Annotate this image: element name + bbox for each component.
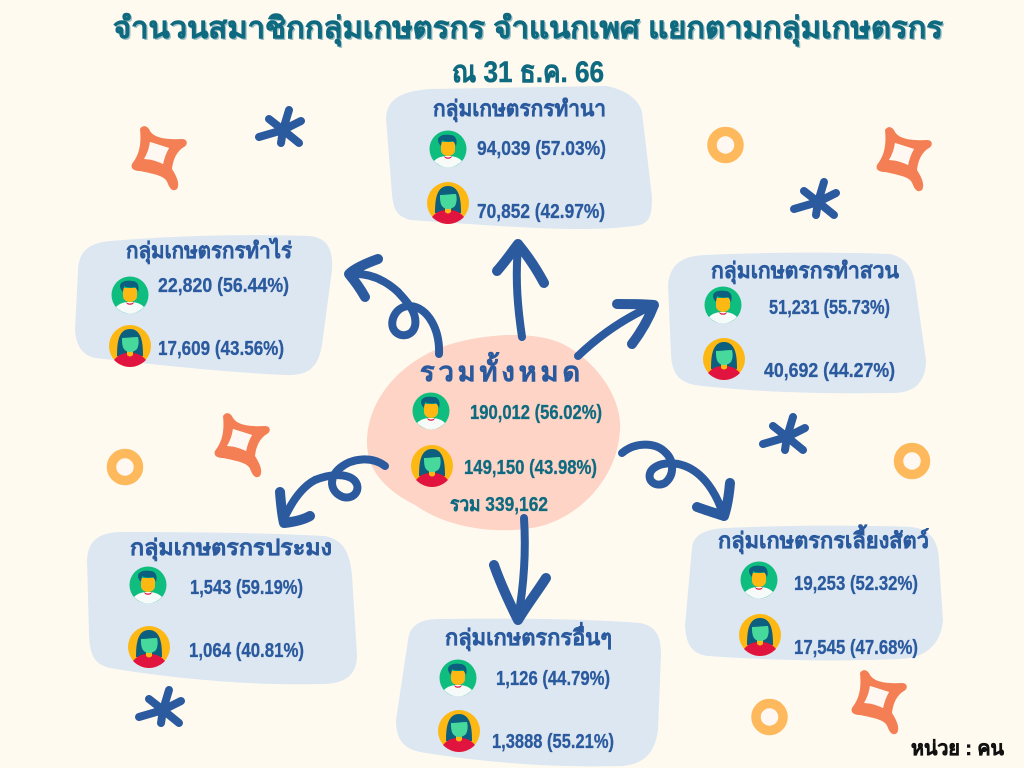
icon: orange sparkle top left [132, 126, 187, 190]
arrow: to fishery farmers [280, 459, 385, 523]
panel: rice farmers: กลุ่มเกษตรกรทำนา [433, 96, 606, 123]
arrow: to field crop farmers [349, 259, 439, 354]
panel: field crop farmers: 22,820 (56.44%) [158, 275, 289, 297]
icon: yellow ring bottom [756, 704, 783, 730]
panel: field crop farmers: กลุ่มเกษตรกรทำไร่ [126, 237, 292, 265]
arrow: to rice farmers [497, 244, 544, 337]
panel: fishery farmers: กลุ่มเกษตรกรประมง [130, 535, 332, 562]
arrow: to livestock farmers [622, 445, 730, 516]
panel: other farmers: กลุ่มเกษตรกรอื่นๆ [445, 621, 612, 652]
panel: livestock farmers: 19,253 (52.32%) [794, 573, 918, 595]
title [113, 12, 945, 89]
panel: livestock farmers [685, 524, 943, 660]
arrow: to orchard farmers [578, 304, 654, 356]
panel: central total [367, 335, 620, 530]
panel: fishery farmers: 1,064 (40.81%) [189, 640, 304, 662]
icon: blue asterisk top right [794, 182, 836, 215]
unit label: หน่วย : คน [911, 738, 1004, 760]
panel: rice farmers: 94,039 (57.03%) [477, 138, 606, 160]
icon: orange sparkle top right [877, 127, 932, 191]
panel: other farmers [396, 619, 661, 766]
panel: central total: 149,150 (43.98%) [464, 457, 597, 479]
title: ณ 31 ธ.ค. 66 [452, 56, 604, 89]
panel: livestock farmers: กลุ่มเกษตรกรเลี้ยงสัตว์ [718, 524, 929, 555]
panel: central total: 190,012 (56.02%) [470, 402, 602, 424]
panel: orchard farmers: 40,692 (44.27%) [764, 360, 895, 382]
panel: other farmers: 1,126 (44.79%) [496, 668, 610, 690]
panel: field crop farmers [75, 235, 332, 375]
panel: orchard farmers: 51,231 (55.73%) [769, 297, 890, 319]
panel: orchard farmers: กลุ่มเกษตรกรทำสวน [711, 258, 899, 285]
icon: orange sparkle bottom right [852, 670, 907, 734]
title: จำนวนสมาชิกกลุ่มเกษตรกร จำแนกเพศ แยกตามกลุ่มเกษตรกร [113, 12, 943, 47]
panel: livestock farmers: 17,545 (47.68%) [794, 637, 918, 659]
icon: blue asterisk mid right [763, 417, 805, 450]
icon: yellow ring mid right [898, 448, 926, 474]
icon: yellow ring top centre-right [712, 132, 739, 158]
panel: rice farmers: 70,852 (42.97%) [477, 201, 605, 223]
title: จำนวนสมาชิกกลุ่มเกษตรกร จำแนกเพศ แยกตามกลุ่มเกษตรกร [114, 14, 945, 48]
panel: other farmers: 1,3888 (55.21%) [492, 731, 614, 753]
panel: central total: รวมทั้งหมด [420, 351, 580, 387]
icon: blue asterisk top left [259, 110, 301, 143]
icon: orange sparkle mid left [215, 413, 270, 477]
panel: field crop farmers: 17,609 (43.56%) [158, 338, 284, 360]
icon: yellow ring mid left [112, 454, 138, 480]
panel: central total: รวม 339,162 [450, 494, 548, 516]
arrow: to other farmers [494, 518, 546, 620]
icon: blue asterisk bottom left [139, 690, 181, 723]
panel: fishery farmers: 1,543 (59.19%) [190, 577, 303, 599]
panel: orchard farmers [668, 253, 926, 393]
panel: fishery farmers [87, 532, 357, 684]
panel: rice farmers [386, 86, 652, 229]
